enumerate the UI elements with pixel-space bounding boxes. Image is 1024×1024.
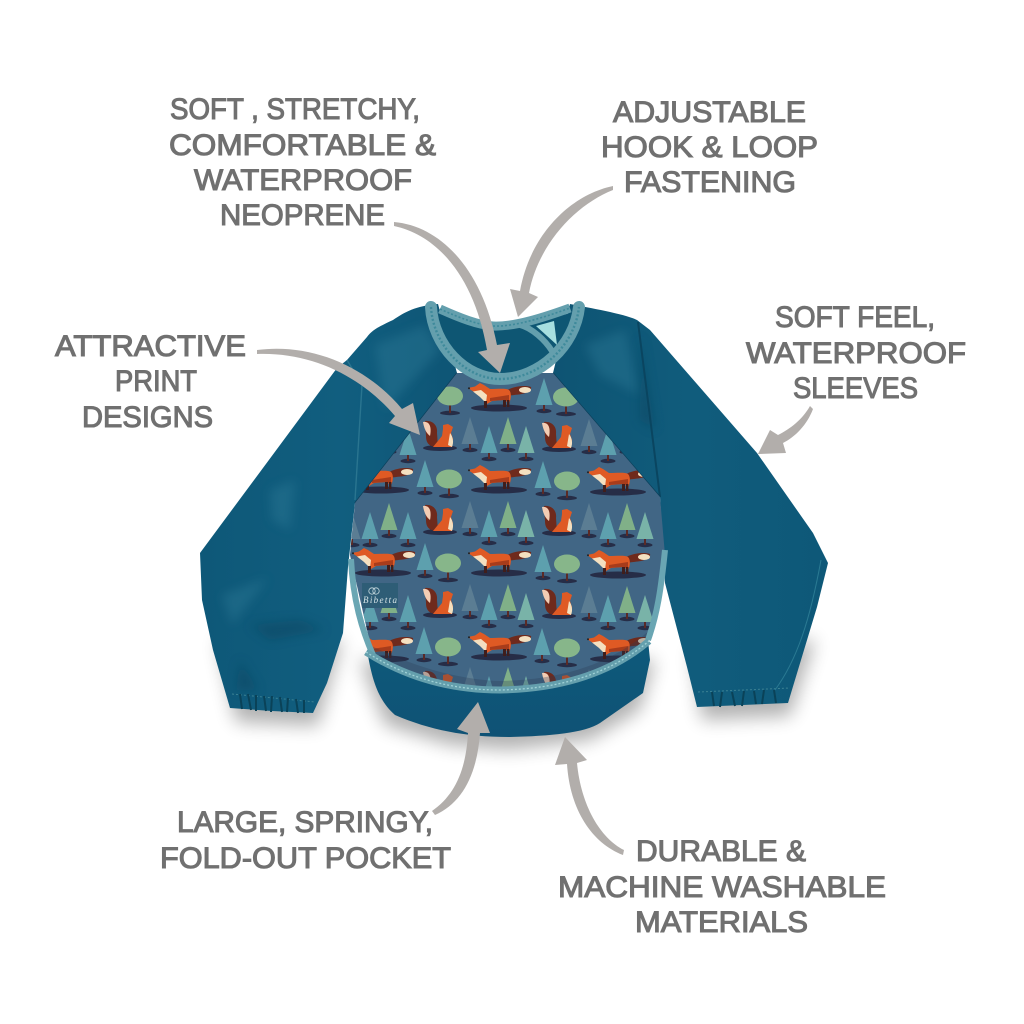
left cuff elastic <box>232 694 315 713</box>
text: materials callout: MACHINE WASHABLE <box>558 871 886 904</box>
text: neoprene callout <box>169 93 436 232</box>
text: fastening callout: ADJUSTABLE <box>613 96 806 129</box>
sleeve shadow folds <box>236 335 655 690</box>
inside of neck <box>432 312 577 378</box>
text: fastening callout <box>601 96 818 199</box>
fold-out pocket <box>367 640 650 737</box>
text: pocket callout: FOLD-OUT POCKET <box>160 842 451 875</box>
illustration: long-sleeved bib <box>200 304 828 737</box>
right sleeve <box>553 304 828 707</box>
back collar binding <box>440 308 570 326</box>
text: print callout: DESIGNS <box>82 401 213 434</box>
text: neoprene callout: SOFT , STRETCHY, <box>170 93 420 126</box>
neckline binding <box>431 307 579 379</box>
text: neoprene callout: NEOPRENE <box>220 199 385 232</box>
garment drop shadow <box>218 640 815 750</box>
neck care label <box>536 321 557 345</box>
fox and forest print <box>350 378 654 686</box>
arrow: waterproof sleeves <box>758 406 813 454</box>
text: pocket callout: LARGE, SPRINGY, <box>177 806 433 839</box>
arrow: pocket <box>432 702 490 815</box>
text: sleeves callout <box>746 301 966 405</box>
right cuff elastic <box>698 560 821 707</box>
arrow: materials <box>555 737 624 855</box>
text: print callout: PRINT <box>115 365 197 398</box>
text: sleeves callout: SOFT FEEL, <box>775 301 935 334</box>
arrow: neoprene <box>394 222 510 373</box>
arrow: hook and loop fastening <box>510 186 613 317</box>
text: sleeves callout: SLEEVES <box>793 372 918 405</box>
text: materials callout: MATERIALS <box>635 906 808 939</box>
text: fastening callout: FASTENING <box>624 166 796 199</box>
text: sleeves callout: WATERPROOF <box>746 337 966 370</box>
text: print callout: ATTRACTIVE <box>55 330 246 363</box>
brand label <box>362 583 398 608</box>
text: neoprene callout: COMFORTABLE & <box>169 129 436 162</box>
text: neoprene callout: WATERPROOF <box>194 164 412 197</box>
printed front panel <box>350 373 665 689</box>
brand label: Bibetta <box>363 595 398 605</box>
text: print callout <box>55 330 246 434</box>
text: materials callout: DURABLE & <box>636 835 806 868</box>
text: materials callout <box>558 835 886 939</box>
left sleeve <box>200 304 457 713</box>
hook and loop flap <box>520 325 552 351</box>
side and pocket binding <box>351 550 665 655</box>
text: fastening callout: HOOK & LOOP <box>601 131 818 164</box>
text: pocket callout <box>160 806 451 875</box>
sleeve seams <box>347 322 660 503</box>
sleeve sheen <box>222 325 640 625</box>
arrow: print designs <box>257 349 420 435</box>
